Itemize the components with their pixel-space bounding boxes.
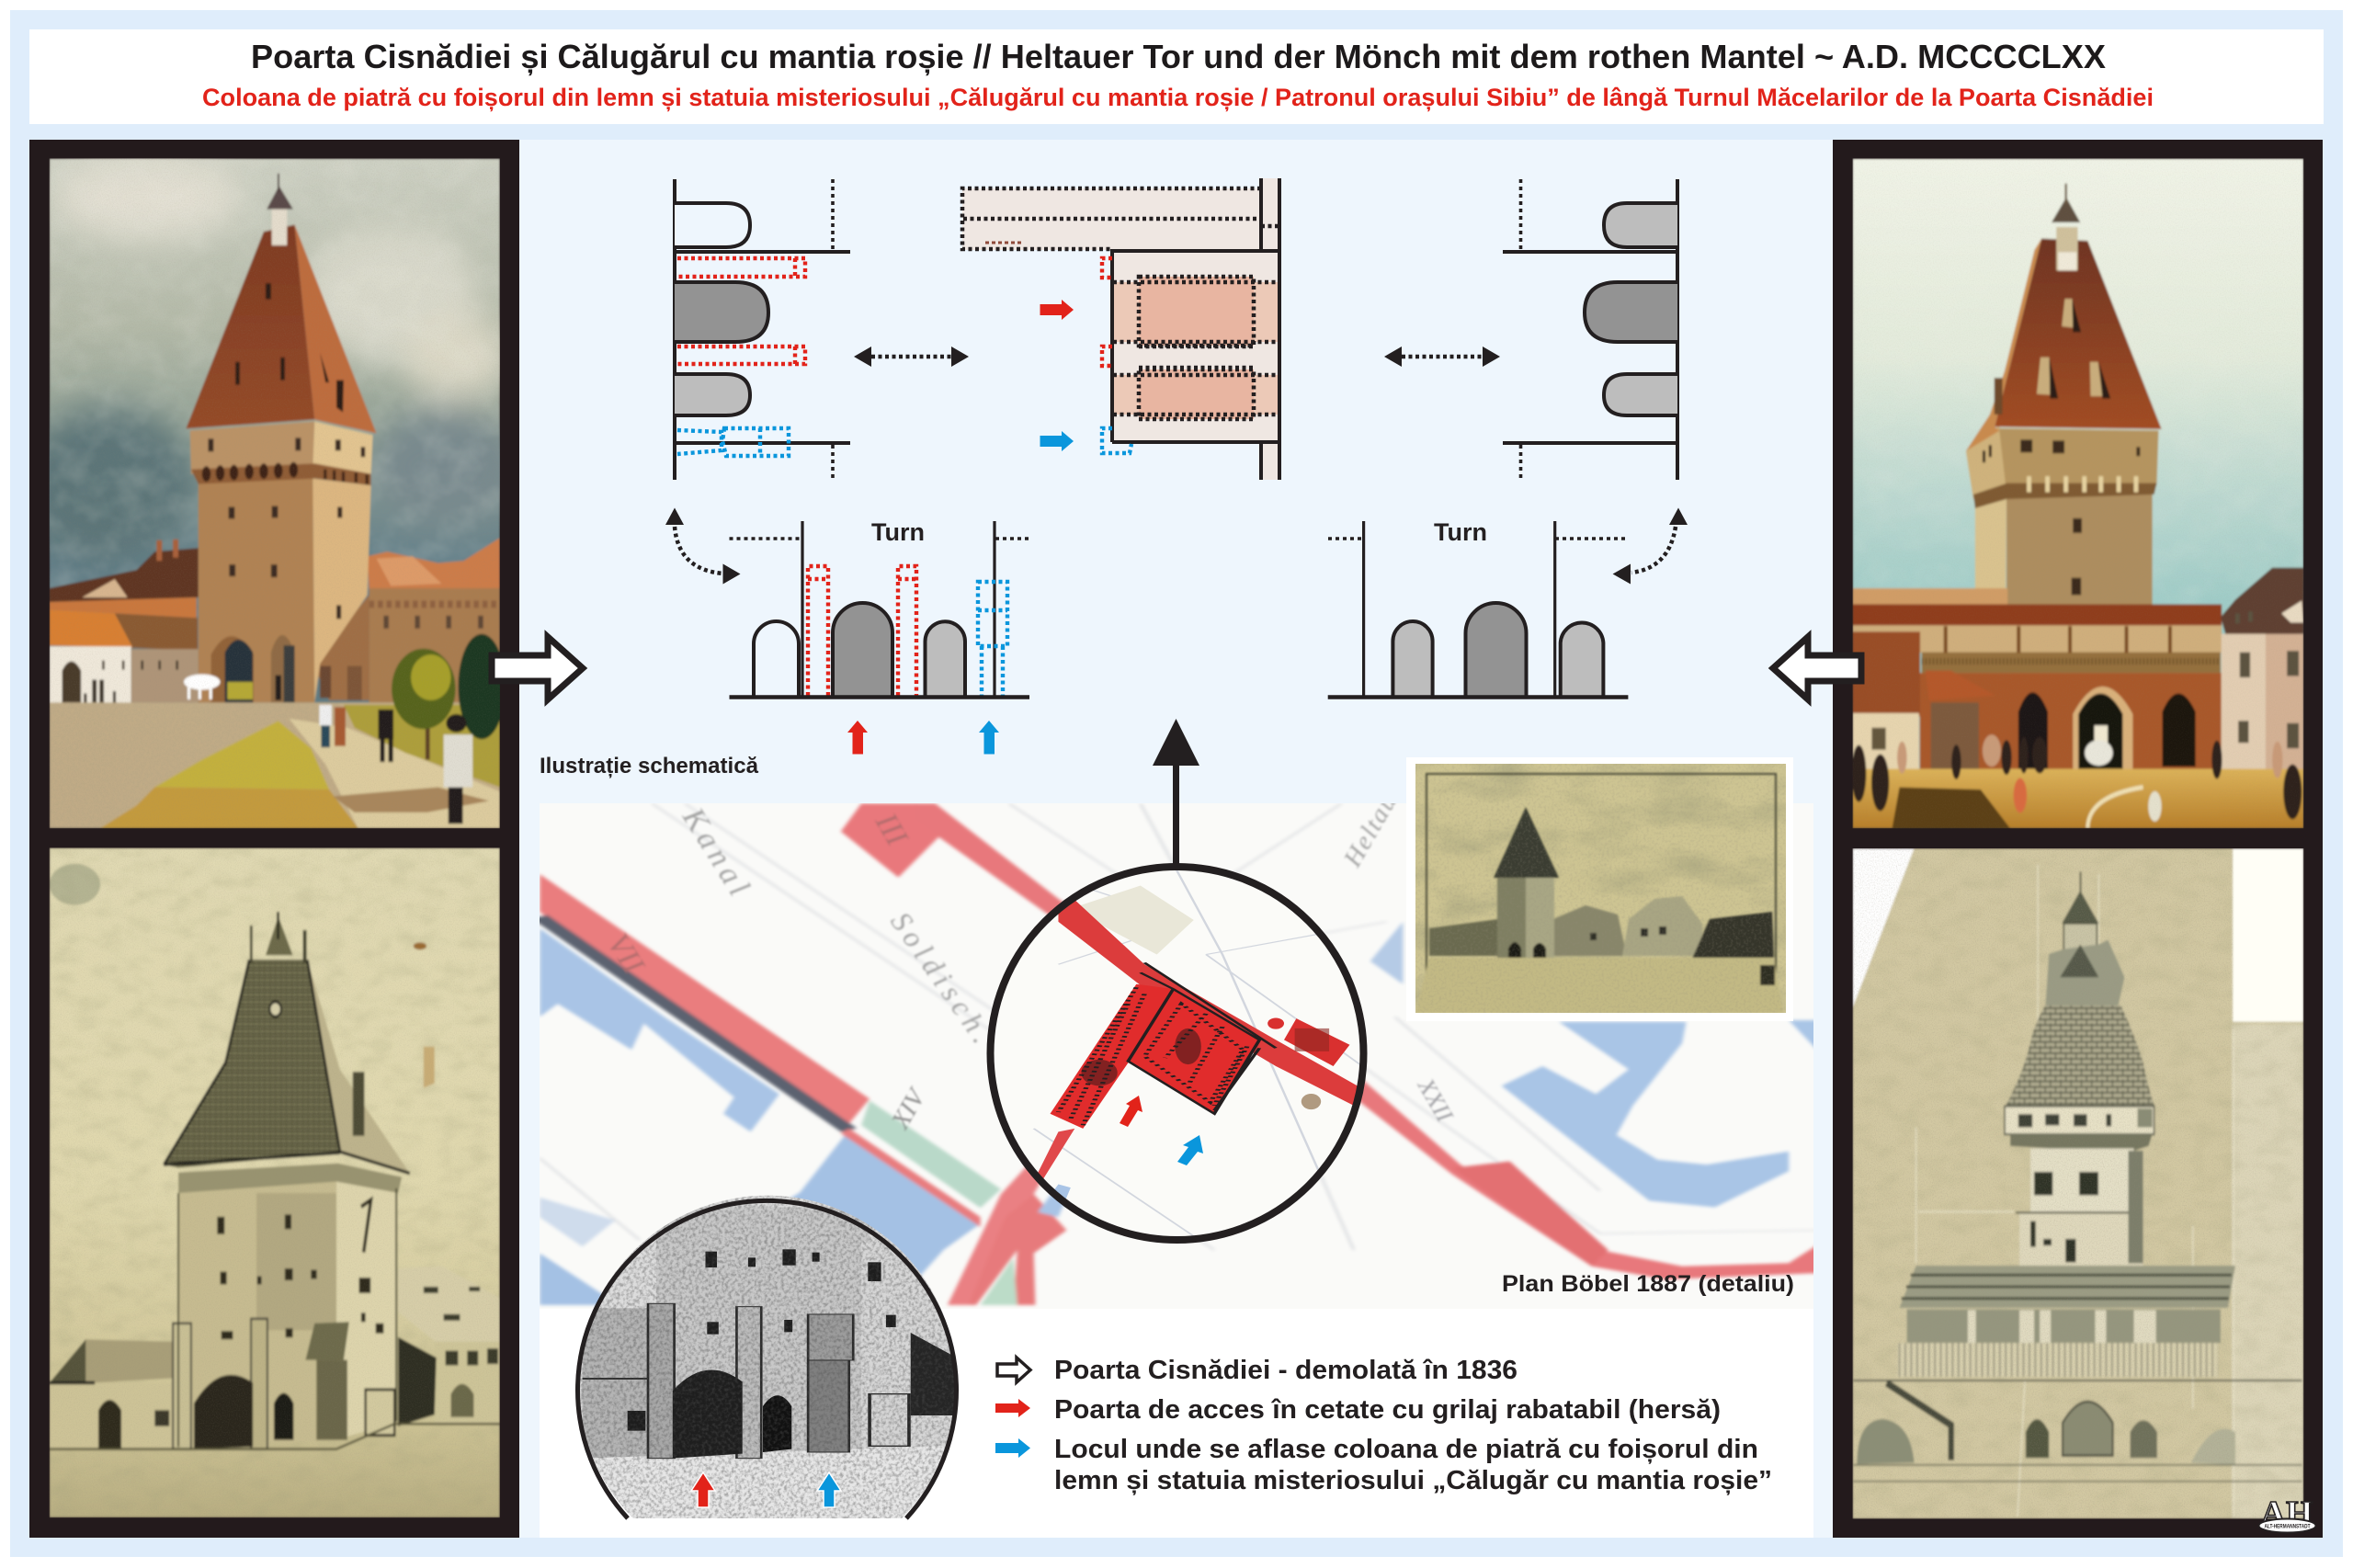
arrow: blue up [979, 721, 999, 754]
legend row: blue arrow: Locul unde se aflase coloana de piatră cu foișorul din [1054, 1435, 1758, 1464]
panel: legend [540, 1309, 1813, 1538]
elevation: right light arch [1561, 623, 1603, 697]
big arrow: map to schematic [1153, 719, 1199, 864]
curved arrow: left plan to elevation [665, 507, 741, 585]
painting: watercolour of the tower, left view [20, 156, 518, 828]
curved arrow: right plan to elevation [1613, 507, 1688, 585]
schematic: centre plan view [962, 178, 1279, 480]
panel: right picture column [1833, 140, 2323, 1538]
magnifier: gate location on the map [987, 863, 1368, 1244]
map labels: Soldisch. [884, 905, 998, 1049]
caption: map source: Plan Böbel 1887 (detaliu) [1502, 1271, 1794, 1297]
label: Turn: Turn [1434, 518, 1487, 546]
drawing: pencil sketch of the tower, left view [50, 847, 500, 1517]
arrow: red up [847, 721, 868, 754]
drawing: pencil elevation of the tower, right view [1853, 848, 2303, 1519]
elevation: left light arch [1392, 621, 1433, 697]
arrow: blue marker in magnifier [1177, 1135, 1203, 1165]
legend row: blue arrow [995, 1435, 1772, 1495]
legend row: white arrow: Poarta Cisnădiei - demolată în 1836 [1054, 1356, 1518, 1385]
arrow: red marker in magnifier [1120, 1096, 1142, 1127]
map labels: Kanal [676, 801, 756, 902]
title banner [29, 29, 2324, 124]
map labels: VII [600, 928, 651, 981]
map labels: XXII [1412, 1074, 1459, 1128]
plan: dark arch middle [1585, 282, 1677, 342]
arrow: red gate marker [1040, 300, 1074, 320]
panel: left picture column [20, 140, 519, 1538]
map: Böbel 1887 plan detail [540, 790, 1820, 1310]
arrow: left picture column to schematic [492, 637, 583, 699]
arrow: blue marker in detail [817, 1472, 841, 1507]
plan: light arch bottom [1604, 374, 1677, 415]
logo: AH Alt-Hermannstadt: AH [2261, 1494, 2313, 1533]
plan: dark arch [675, 282, 768, 342]
map labels: Heltau [1338, 790, 1403, 872]
central panel background [519, 140, 1833, 1538]
magnifier: detail of the gate sketch [570, 1195, 965, 1526]
map labels: III [869, 807, 915, 853]
schematic: right plan view [1503, 179, 1677, 480]
schematic: right elevation with label Turn [1328, 507, 1688, 697]
map labels: XIV [886, 1083, 932, 1134]
painting: watercolour of the tower, right view [1851, 158, 2303, 828]
elevation: light arch [925, 621, 965, 697]
map labels: Brunn. [1275, 1107, 1326, 1175]
schematic: left plan view [675, 179, 850, 480]
subtitle: Coloana de piatră cu foișorul din lemn și statuia misteriosului „Călugărul cu mantia roșie / Patronul orașului Sibiu” de lângă Turnul Măcelarilor de la Poarta Cisnădiei [202, 84, 2154, 111]
legend row: red arrow: Poarta de acces în cetate cu grilaj rabatabil (hersă) [1054, 1395, 1721, 1425]
arrow: red marker in detail [691, 1472, 715, 1507]
label: Turn: Turn [871, 518, 925, 546]
elevation: centre dark arch [1465, 603, 1526, 697]
caption: schematic illustration: Ilustrație schematică [540, 754, 759, 778]
elevation: dark arch [833, 603, 892, 697]
double arrow: centre plan to right plan [1384, 347, 1500, 367]
arrow: right picture column to schematic [1773, 637, 1861, 699]
arrow: blue column marker [1040, 431, 1074, 451]
main title: Poarta Cisnădiei și Călugărul cu mantia roșie // Heltauer Tor und der Mönch mit dem rothen Mantel ~ A.D. MCCCCLXX [251, 38, 2106, 75]
logo: AH Alt-Hermannstadt: ALT-HERMANNSTADT [2265, 1524, 2311, 1529]
double arrow: left plan to centre plan [854, 347, 969, 367]
schematic: left elevation with label Turn [665, 507, 1029, 754]
map labels: Brunnen [1246, 955, 1322, 1031]
elevation: open arch [754, 621, 799, 697]
plan: open arch [675, 203, 750, 247]
inset: sketch of the street view [1406, 757, 1793, 1021]
plan: light arch [675, 374, 750, 415]
map labels [610, 803, 1454, 1131]
plan: light arch top [1604, 203, 1677, 247]
legend row: blue arrow: lemn și statuia misteriosului „Călugăr cu mantia roșie” [1054, 1466, 1772, 1495]
